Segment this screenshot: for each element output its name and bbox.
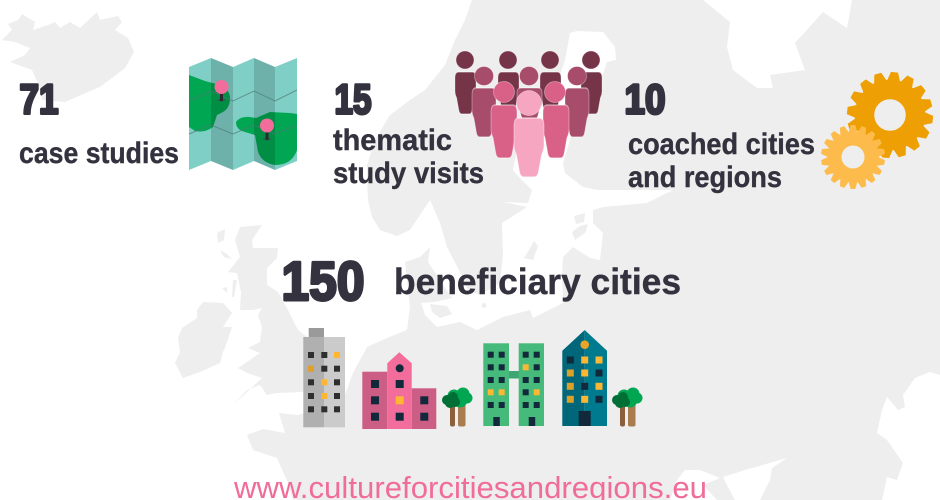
second row people	[491, 82, 569, 158]
icon: folded map with pins	[189, 58, 297, 170]
icon: pink building	[362, 352, 436, 429]
icon: grey tower	[303, 328, 345, 427]
front person	[514, 90, 544, 177]
stat: 71 case studies	[19, 76, 179, 170]
map: Skagerrak and Baltic Sea	[397, 31, 673, 330]
icon: gears	[821, 68, 937, 189]
map: Scottish islands	[217, 229, 237, 297]
label beneficiary cities: beneficiary cities	[394, 261, 681, 302]
map: Baltic islands	[430, 213, 588, 318]
number 71: 71	[20, 76, 58, 122]
icon: trees left	[442, 388, 472, 426]
icon: trees right	[612, 388, 642, 426]
green area right	[236, 112, 297, 165]
large gear	[843, 68, 937, 162]
number 150: 150	[282, 250, 364, 312]
middle row people	[472, 66, 589, 137]
map: Iceland	[2, 12, 134, 102]
map: Ireland	[175, 302, 232, 378]
pin two	[260, 118, 274, 140]
small gear	[821, 125, 885, 189]
back row people	[455, 51, 602, 114]
fold lines	[189, 90, 297, 134]
map: Aegean Sea	[723, 458, 787, 500]
label coached cities and regions: and regions	[628, 161, 782, 194]
stat: 15 thematic study visits	[333, 76, 484, 190]
icon: green twin towers	[483, 343, 544, 426]
stat: 10 coached cities and regions	[624, 76, 815, 194]
number 10: 10	[624, 76, 666, 122]
stat: 150 beneficiary cities	[282, 250, 681, 312]
map sheet	[189, 58, 297, 170]
map: Adriatic Sea	[670, 470, 720, 500]
icon: group of people	[455, 51, 602, 177]
icon: teal gabled building	[562, 330, 607, 426]
green area left	[189, 75, 230, 132]
label coached cities and regions: coached cities	[628, 128, 815, 161]
label thematic study visits: thematic	[333, 124, 452, 157]
map: White Sea	[703, 0, 852, 88]
pin one	[214, 80, 228, 102]
map: mainland Europe	[247, 0, 940, 500]
label thematic study visits: study visits	[333, 157, 484, 190]
map: Black Sea	[877, 372, 940, 500]
number 15: 15	[334, 76, 372, 122]
map: Great Britain	[228, 225, 322, 405]
map folds	[211, 58, 275, 170]
label case studies: case studies	[19, 137, 179, 170]
